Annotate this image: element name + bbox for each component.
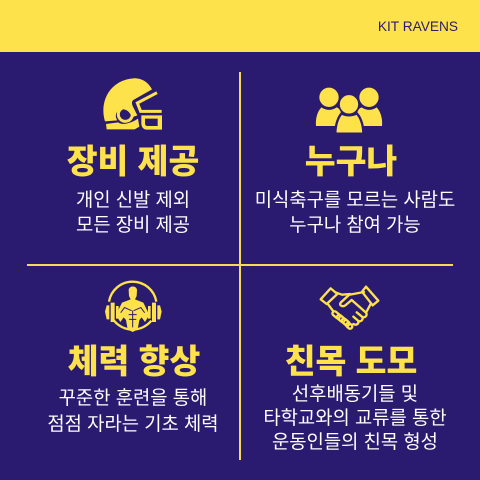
icon: bodybuilder with barbell	[105, 280, 162, 332]
header bar	[0, 0, 480, 52]
brand label: KIT RAVENS	[378, 19, 458, 34]
text: friendship description: 타학교와의 교류를 통한	[263, 407, 447, 428]
text: equipment description: 모든 장비 제공	[76, 214, 190, 235]
text: fitness description: 점점 자라는 기초 체력	[47, 413, 219, 434]
text: friendship description: 선후배동기들 및	[292, 383, 418, 404]
icon: handshake	[320, 285, 380, 330]
text: fitness description	[47, 387, 219, 434]
text: anyone description	[255, 189, 455, 235]
icon: group of people	[316, 88, 382, 132]
heading: anyone: 누구나	[305, 144, 397, 181]
heading: friendship: 친목 도모	[285, 344, 417, 381]
text: friendship description	[263, 383, 447, 452]
heading: equipment: 장비 제공	[67, 144, 199, 181]
text: equipment description: 개인 신발 제외	[76, 189, 190, 210]
icon: football helmet	[103, 78, 162, 130]
heading: fitness: 체력 향상	[68, 344, 200, 381]
text: anyone description: 미식축구를 모르는 사람도	[255, 189, 455, 210]
text: anyone description: 누구나 참여 가능	[289, 214, 421, 235]
text: fitness description: 꾸준한 훈련을 통해	[59, 387, 207, 408]
text: friendship description: 운동인들의 친목 형성	[272, 431, 438, 452]
text: equipment description	[76, 189, 190, 235]
